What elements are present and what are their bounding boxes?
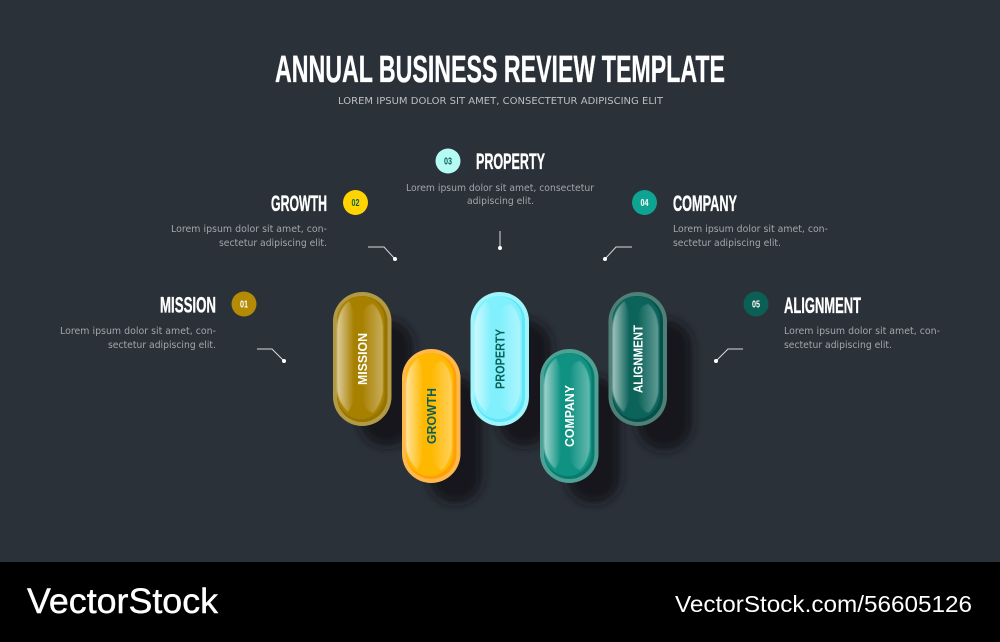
number badge 02 [343, 190, 368, 215]
text block: company [673, 224, 828, 249]
pill label: property: PROPERTY [492, 329, 508, 389]
text block: alignment: Lorem ipsum dolor sit amet, con- [784, 326, 940, 337]
pill label: mission: MISSION [355, 333, 370, 385]
footer logo: VectorStock [27, 582, 219, 621]
number badge 04: 04 [640, 198, 649, 209]
text block: company: Lorem ipsum dolor sit amet, con- [673, 224, 828, 235]
panel: alignment [714, 292, 940, 363]
footer id: VectorStock.com/56605126 [675, 591, 972, 617]
connector: mission [257, 349, 286, 363]
heading: growth: GROWTH [271, 191, 327, 216]
panel: company [603, 190, 828, 261]
text block: growth [171, 224, 327, 249]
number badge 04 [632, 190, 657, 215]
subtitle: LOREM IPSUM DOLOR SIT AMET, CONSECTETUR ADIPISCING ELIT [338, 96, 664, 107]
text block: property: adipiscing elit. [467, 196, 534, 207]
text block: mission [60, 326, 216, 351]
heading: company: COMPANY [673, 191, 737, 216]
heading: property: PROPERTY [476, 149, 545, 174]
number badge 01: 01 [240, 300, 248, 310]
connector: growth [368, 247, 397, 261]
connector: alignment [714, 349, 743, 363]
panel: property [406, 148, 594, 250]
text block: alignment [784, 326, 940, 351]
number badge 03: 03 [444, 156, 452, 168]
pill: company [540, 349, 598, 483]
number badge 01 [232, 292, 256, 316]
title: ANNUAL BUSINESS REVIEW TEMPLATE [275, 49, 725, 91]
number badge 05 [744, 292, 768, 316]
connector: property [498, 231, 502, 250]
number badge 03 [436, 148, 460, 174]
pill label: growth: GROWTH [424, 388, 439, 444]
footer bar [0, 562, 1000, 642]
heading: mission: MISSION [160, 292, 216, 318]
text block: property [406, 183, 594, 207]
panel: mission [60, 292, 286, 363]
text block: alignment: sectetur adipiscing elit. [784, 340, 892, 351]
number badge 05: 05 [752, 300, 760, 310]
text block: mission: sectetur adipiscing elit. [108, 340, 216, 351]
pill: mission [333, 292, 392, 426]
text block: company: sectetur adipiscing elit. [673, 238, 781, 249]
panel: growth [171, 190, 397, 261]
pill: growth [402, 349, 460, 483]
pill shadows [360, 320, 692, 503]
text block: mission: Lorem ipsum dolor sit amet, con- [60, 326, 216, 337]
pill: property [470, 292, 529, 426]
pill: alignment [608, 292, 667, 426]
connector: company [603, 247, 632, 261]
number badge 02: 02 [352, 198, 360, 209]
text block: growth: Lorem ipsum dolor sit amet, con- [171, 224, 327, 235]
text block: growth: sectetur adipiscing elit. [219, 238, 327, 249]
pill label: company: COMPANY [562, 385, 577, 447]
heading: alignment: ALIGNMENT [784, 293, 861, 318]
text block: property: Lorem ipsum dolor sit amet, consectetur [406, 183, 594, 194]
pill label: alignment: ALIGNMENT [630, 325, 646, 393]
